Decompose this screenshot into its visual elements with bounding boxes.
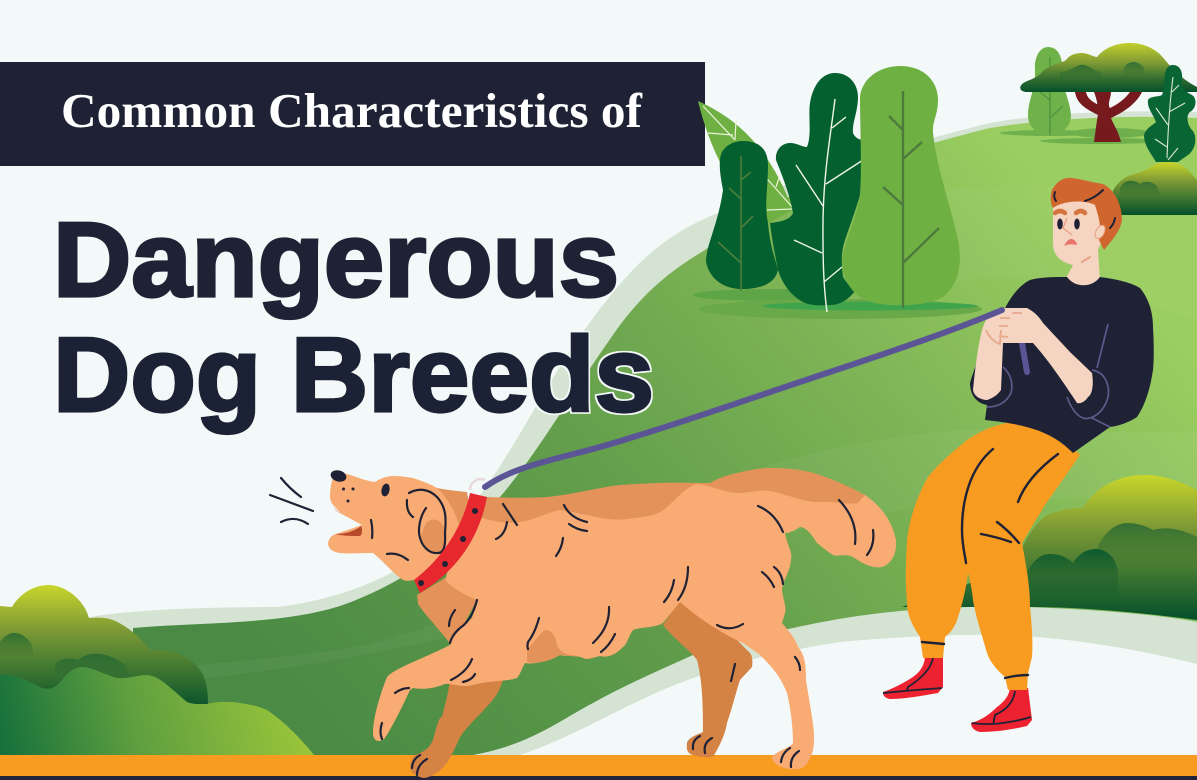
- neck shade: [437, 488, 470, 535]
- title line: dog breeds: Dog Breeds: [53, 316, 654, 434]
- tree: light tall: [842, 66, 960, 308]
- head: [328, 473, 462, 581]
- canopy: [1020, 43, 1197, 92]
- right shoe: [971, 688, 1032, 732]
- ground path: [473, 607, 1197, 755]
- dog body: [373, 484, 896, 769]
- title line: dangerous: Dangerous: [53, 201, 619, 319]
- trousers: [906, 421, 1080, 690]
- far hind leg: [663, 600, 752, 757]
- dog: [270, 310, 1002, 778]
- hair: [1051, 178, 1122, 250]
- leash lower end: [1022, 343, 1027, 372]
- sweater: [970, 277, 1154, 453]
- nose: [329, 469, 348, 483]
- left shoe: [883, 655, 943, 699]
- tree: flat-top canopy: [1020, 43, 1197, 142]
- arms and hands: [973, 308, 1093, 403]
- hill pale outline: [90, 111, 1197, 760]
- fang: [332, 503, 340, 512]
- small light tree far right: [1000, 47, 1160, 144]
- person: [883, 178, 1154, 732]
- chest shadow: [417, 578, 477, 646]
- leash: [485, 310, 1002, 487]
- trunk: [1075, 92, 1142, 142]
- face details: [1055, 211, 1105, 262]
- collar ring: [470, 479, 485, 490]
- leaf: light back: [698, 101, 793, 223]
- bark sound lines: [270, 478, 313, 524]
- back and tail shade: [470, 468, 870, 530]
- bush: lower right: [902, 475, 1197, 620]
- bush: lower left front: [0, 667, 314, 755]
- tree: dark middle: [770, 73, 863, 312]
- eye and muzzle marks: [342, 483, 391, 502]
- collar: [414, 493, 487, 593]
- fur lines: [371, 500, 873, 775]
- title bar: [0, 62, 705, 166]
- tree group centre: [693, 66, 982, 319]
- bottom stripe: [0, 755, 1197, 780]
- green hill: [133, 117, 1197, 760]
- small dark leaf tree right: [1144, 65, 1196, 162]
- tree: dark left: [706, 141, 778, 291]
- bush: lower left back: [0, 585, 208, 710]
- far front leg: [410, 680, 503, 778]
- neck and head skin: [1053, 198, 1104, 286]
- belly shade: [527, 630, 580, 663]
- bush: upper right: [1109, 162, 1197, 215]
- main title: [53, 201, 654, 434]
- heading: common characteristics: Common Characteristics of: [61, 83, 643, 138]
- mouth tongue: [335, 526, 362, 536]
- ear: [409, 490, 446, 553]
